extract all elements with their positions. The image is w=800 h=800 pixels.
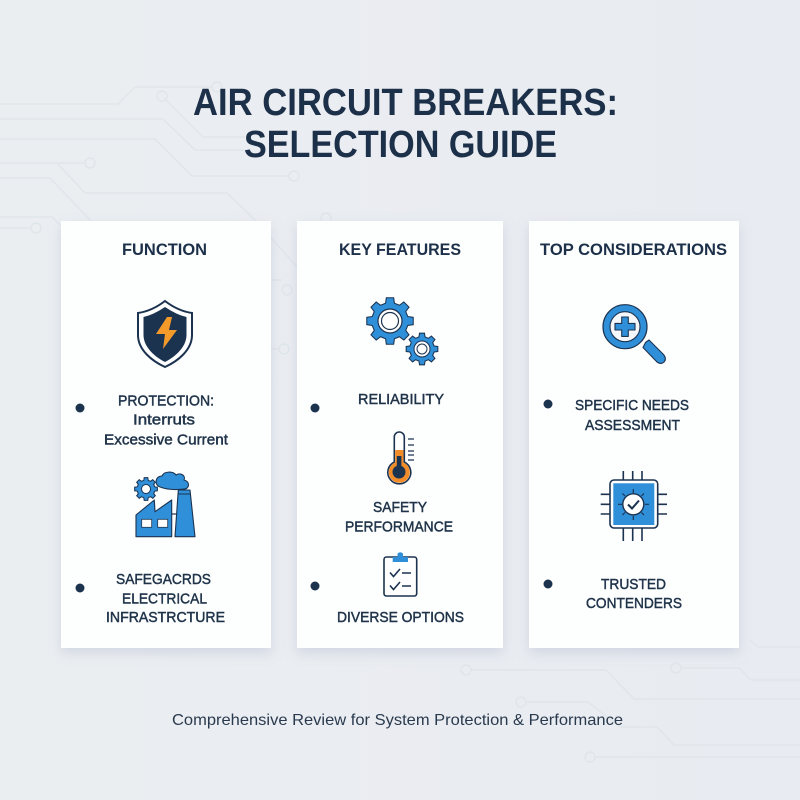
icon: clipboard checklist <box>384 552 417 596</box>
title <box>193 82 618 166</box>
text: safety performance: SAFETY <box>373 500 427 516</box>
icon: factory with gear and cloud <box>135 472 195 537</box>
text: safety performance <box>345 500 453 536</box>
text: specific needs assessment: ASSESSMENT <box>585 418 680 434</box>
text: protection: Interruts <box>133 412 195 428</box>
icon: chip with check <box>601 471 667 541</box>
text: specific needs assessment: SPECIFIC NEEDS <box>575 398 689 414</box>
text: reliability: RELIABILITY <box>358 392 444 408</box>
panel: function <box>61 221 271 648</box>
text: protection: PROTECTION: <box>118 394 214 410</box>
panel: top considerations <box>529 221 739 648</box>
bullet <box>544 580 552 588</box>
icon: gears <box>367 298 438 365</box>
icon: magnifying glass with plus <box>603 305 665 364</box>
heading: key features: KEY FEATURES <box>339 240 461 259</box>
text: safeguards <box>106 572 225 626</box>
heading: function: FUNCTION <box>122 240 207 259</box>
bullet <box>544 400 552 408</box>
text: trusted contenders: CONTENDERS <box>586 596 682 612</box>
text: protection: Excessive Current <box>104 432 228 448</box>
text: safeguards: ELECTRICAL <box>122 592 207 608</box>
bullet <box>76 584 84 592</box>
title: SELECTION GUIDE <box>244 124 557 166</box>
bullet <box>310 582 320 590</box>
title: AIR CIRCUIT BREAKERS: <box>193 82 618 124</box>
footer tagline: Comprehensive Review for System Protection & Performance <box>172 712 623 729</box>
text: diverse options: DIVERSE OPTIONS <box>337 610 464 626</box>
bullet <box>310 404 320 412</box>
text: safeguards: INFRASTRCTURE <box>106 610 225 626</box>
icon: shield with lightning bolt <box>138 301 192 367</box>
text: safeguards: SAFEGACRDS <box>116 572 211 588</box>
text: specific needs assessment <box>575 398 689 434</box>
text: safety performance: PERFORMANCE <box>345 520 453 536</box>
heading: top considerations: TOP CONSIDERATIONS <box>540 240 727 259</box>
text: protection <box>104 394 228 448</box>
text: trusted contenders: TRUSTED <box>601 577 666 593</box>
icon: thermometer <box>388 432 414 484</box>
text: trusted contenders <box>586 577 682 612</box>
panel: key features <box>297 221 503 648</box>
bullet <box>76 404 84 412</box>
